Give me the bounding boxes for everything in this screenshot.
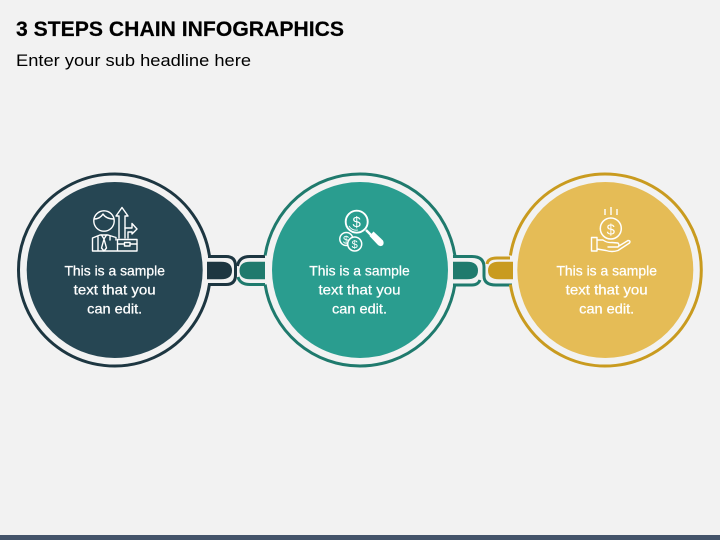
title: 3 STEPS CHAIN INFOGRAPHICS	[16, 17, 344, 41]
text: step 1: This is a sample	[64, 262, 165, 278]
text: step 2: This is a sample	[309, 262, 410, 278]
subtitle: Enter your sub headline here	[16, 51, 251, 70]
connector: first chain link	[207, 256, 265, 284]
icon: businessman with arrows and briefcase	[92, 208, 137, 251]
icon: hand holding coin: $	[607, 222, 616, 238]
text: step 3	[556, 262, 657, 316]
icon: magnifier and coins: $	[343, 234, 349, 246]
text: step 2: can edit.	[332, 300, 387, 316]
footer bar	[0, 535, 720, 540]
panel: step 2 circle	[265, 174, 455, 366]
text: step 1	[64, 262, 165, 316]
connector: second chain link	[453, 256, 513, 285]
text: step 1: text that you	[74, 282, 156, 298]
icon: magnifier and coins	[340, 211, 384, 251]
icon: hand holding coin	[592, 207, 630, 252]
text: step 3: This is a sample	[556, 262, 657, 278]
text: step 2: text that you	[318, 282, 400, 298]
icon: magnifier and coins: $	[352, 239, 358, 251]
icon: magnifier and coins: $	[353, 214, 362, 231]
text: step 1: can edit.	[87, 300, 142, 316]
panel: step 3 circle	[510, 174, 701, 366]
text: step 2	[309, 262, 410, 316]
text: step 3: text that you	[566, 282, 648, 298]
text: step 3: can edit.	[579, 300, 634, 316]
panel: step 1 circle	[19, 174, 209, 366]
